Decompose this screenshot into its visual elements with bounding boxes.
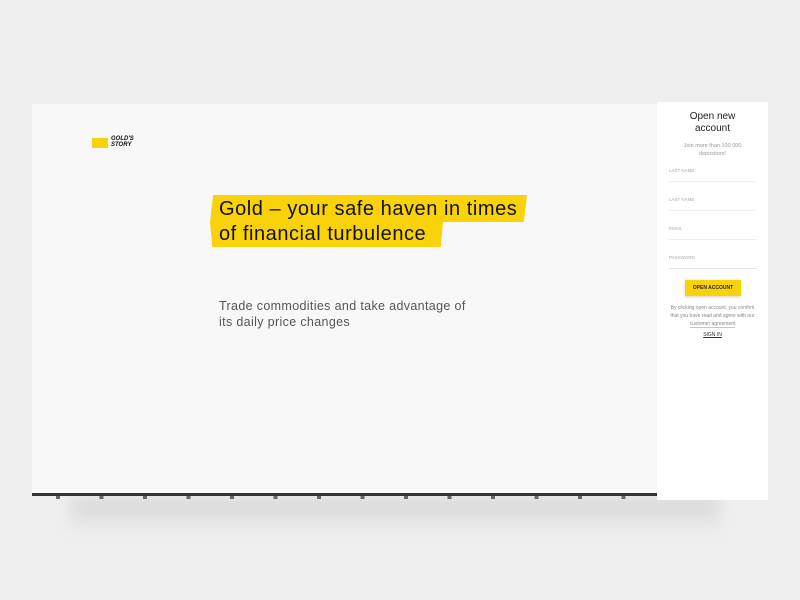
signup panel	[657, 102, 768, 500]
logo	[92, 136, 134, 148]
button: OPEN ACCOUNT	[693, 285, 733, 291]
fields: EMAIL	[669, 226, 683, 231]
shadow under device	[70, 498, 720, 532]
form title: account	[695, 123, 730, 134]
disclaimer	[670, 305, 755, 328]
logo: GOLD'S	[111, 136, 134, 142]
sign in: SIGN IN	[703, 332, 722, 338]
fields: PASSWORD	[669, 255, 695, 260]
subtitle: Join more than 100 000	[684, 143, 741, 149]
subtitle	[219, 299, 466, 329]
fields	[669, 168, 757, 269]
headline	[210, 195, 527, 247]
disclaimer: By clicking open account, you confirm	[671, 305, 754, 311]
button	[685, 280, 741, 296]
disclaimer: customer agreement	[690, 321, 735, 327]
disclaimer: that you have read and agree with our	[670, 313, 755, 319]
fields: LAST NAME	[669, 168, 694, 173]
main panel	[32, 104, 657, 494]
fields: LAST NAME	[669, 197, 694, 202]
headline: Gold – your safe haven in times	[219, 198, 517, 220]
subtitle: its daily price changes	[219, 315, 350, 329]
subtitle	[684, 143, 742, 157]
subtitle: depositors!	[699, 151, 726, 157]
form title	[690, 111, 736, 134]
headline: of financial turbulence	[219, 223, 426, 245]
form title: Open new	[690, 111, 735, 122]
subtitle: Trade commodities and take advantage of	[219, 299, 466, 313]
bottom bar with ticks	[32, 493, 657, 499]
logo: STORY	[111, 142, 131, 148]
